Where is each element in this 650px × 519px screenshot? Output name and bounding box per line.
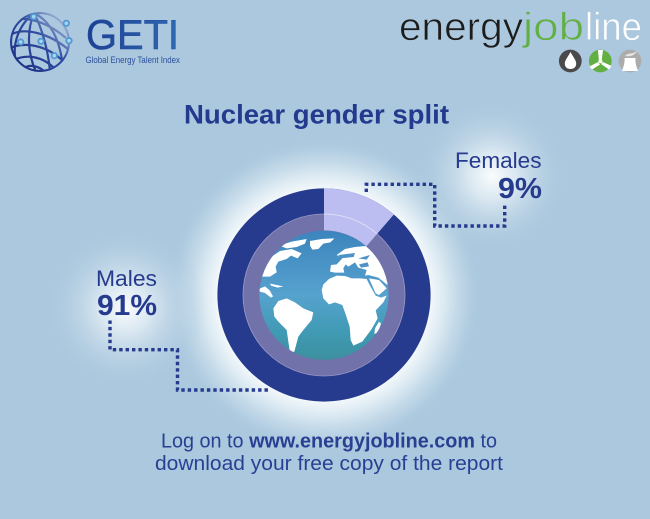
wordmark: job <box>522 6 584 49</box>
GETI tagline: Global Energy Talent Index <box>86 55 180 66</box>
glow behind males label <box>43 226 207 390</box>
label: males <box>96 266 157 322</box>
north america <box>260 249 302 277</box>
value: 9%: 9% <box>498 173 542 205</box>
globe <box>259 231 398 360</box>
icon: network nodes <box>18 14 72 58</box>
GETI wordmark: GETI <box>86 11 179 58</box>
icon: wind turbine <box>589 50 612 72</box>
ring highlight <box>324 214 377 234</box>
glow behind females label <box>414 98 570 254</box>
title: Nuclear gender split <box>184 100 449 130</box>
value: 91%: 91% <box>97 290 157 322</box>
arabia <box>369 278 387 295</box>
males segment <box>217 188 431 402</box>
wordmark: line <box>585 6 642 49</box>
greenland <box>310 238 334 250</box>
energyjobline logo <box>399 6 642 72</box>
canadian arctic <box>279 239 307 248</box>
label: males: Males <box>96 266 157 291</box>
africa <box>322 276 387 346</box>
call to action <box>155 430 503 475</box>
south america <box>273 298 313 352</box>
icon: nuclear cooling tower <box>619 50 641 72</box>
connector: males <box>110 320 268 390</box>
central america <box>259 284 283 298</box>
madagascar <box>374 322 381 334</box>
eurasia <box>330 246 388 285</box>
icon: wire globe <box>10 13 72 72</box>
glow behind donut <box>166 137 482 453</box>
ocean <box>259 231 389 360</box>
call to action: Log on to www.energyjobline.com to <box>161 430 497 452</box>
label: females: Females <box>455 148 542 173</box>
females segment <box>324 188 394 246</box>
donut chart <box>217 188 431 402</box>
connector: females <box>366 184 505 226</box>
GETI logo <box>10 11 180 72</box>
inland seas <box>338 253 370 268</box>
icon: oil drop <box>559 50 582 72</box>
continents <box>259 238 398 352</box>
label: females <box>455 148 542 205</box>
inner translucent ring <box>243 214 405 376</box>
wordmark: energy <box>399 6 524 49</box>
call to action: download your free copy of the report <box>155 453 503 475</box>
